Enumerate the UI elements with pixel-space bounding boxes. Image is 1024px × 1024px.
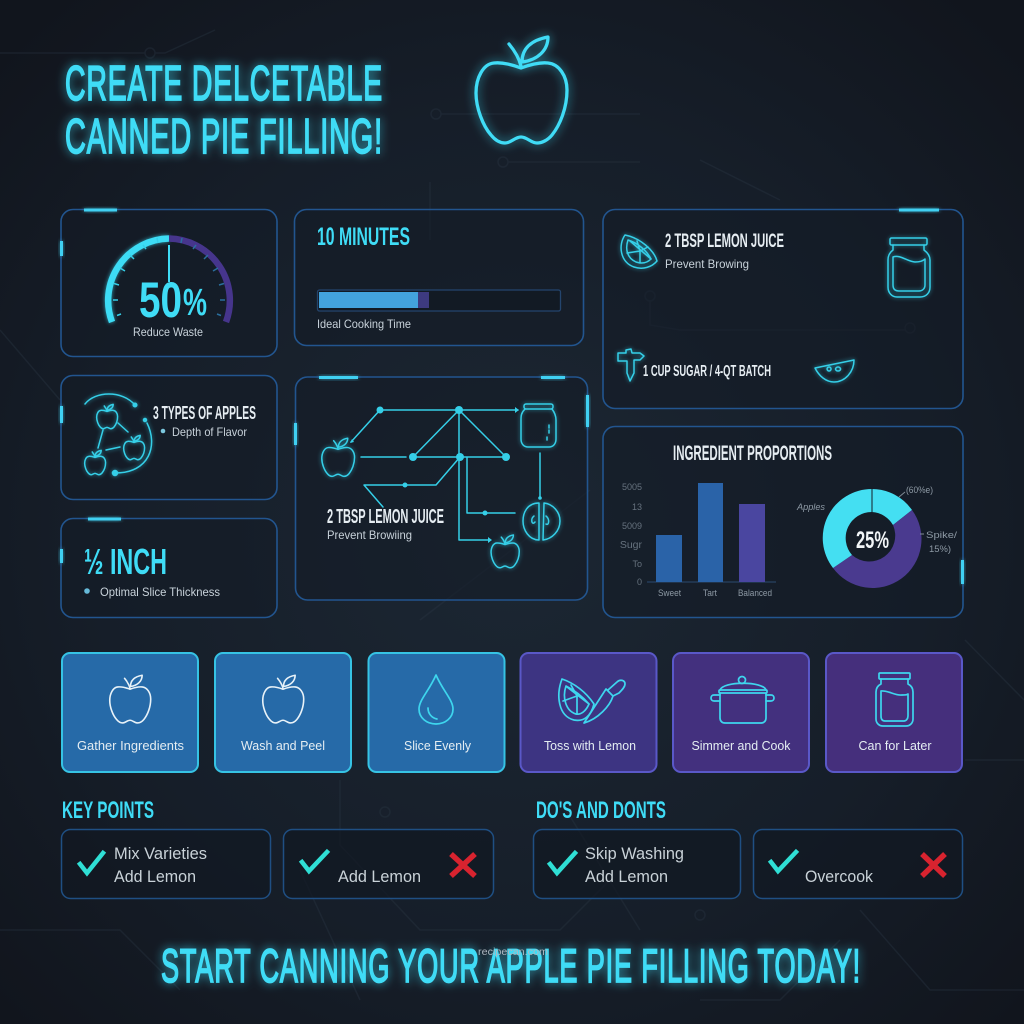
donut chart: Spike/ [926,530,957,541]
donut chart: 25% [856,527,889,554]
step: slice evenly [368,653,504,772]
title: CANNED PIE FILLING! [65,110,383,164]
icon: cross [451,854,475,876]
bar chart: 13 [632,502,642,512]
panel: lemon juice and sugar [603,208,963,408]
bar chart: To [632,559,642,569]
card: overcook: Overcook [805,867,873,886]
card: add lemon: Add Lemon [338,867,421,886]
caption: Prevent Browiing [327,528,412,542]
heading: 2 TBSP LEMON JUICE [327,506,444,528]
step: can for later: Can for Later [858,738,932,753]
icon: jar [876,673,913,726]
card: mix varieties [62,830,270,898]
bar chart [620,482,776,599]
card: add lemon [284,830,494,898]
heading: dos and donts: DO'S AND DONTS [536,797,666,824]
gauge label: Reduce Waste [133,325,203,339]
step: wash and peel [215,653,351,772]
bar chart: Sugr [620,539,642,551]
panel: ingredient proportions [603,426,964,618]
icon: pot [711,676,774,723]
icon: water drop [419,675,453,724]
step: simmer and cook: Simmer and Cook [692,738,791,753]
panel: three types of apples [60,376,277,500]
progress bar [318,290,560,311]
heading: 10 MINUTES [317,223,410,251]
caption: Ideal Cooking Time [317,317,411,331]
gauge arc [108,238,230,322]
card: skip washing: Add Lemon [585,867,668,886]
website: recipecan.com [478,947,548,958]
gauge value: 50 [139,272,182,328]
icon: cross [922,854,945,876]
panel: slice thickness [60,518,277,618]
bullet text: Optimal Slice Thickness [100,585,220,599]
heading: INGREDIENT PROPORTIONS [673,442,832,465]
icon: tool [618,349,644,381]
panel: cooking time [294,210,584,346]
bar chart: 5005 [622,482,642,492]
donut chart: Apples [796,502,825,513]
bar chart: Balanced [738,588,772,599]
bullet text: Depth of Flavor [172,425,247,439]
icon: apple [263,675,304,723]
panel: network diagram [294,376,589,600]
donut chart [796,485,957,588]
bar chart: Tart [703,588,717,599]
card: mix varieties: Mix Varieties [114,844,207,863]
bar chart: 0 [637,577,642,587]
icon: jar [521,404,556,447]
icon: check [550,853,575,873]
step: toss with lemon [520,653,656,772]
gauge value: % [183,282,207,324]
icon: lemon halves [523,503,560,540]
card: overcook [754,830,962,898]
connector lines [350,406,542,543]
heading: 2 TBSP LEMON JUICE [665,231,784,252]
donut chart: (60%e) [906,485,933,496]
card: skip washing [534,830,740,898]
icon: check [80,853,103,873]
apple cycle diagram [85,394,152,476]
icon: check [771,852,796,871]
step: gather ingredients: Gather Ingredients [77,738,184,753]
icon: apple [110,675,151,723]
caption: Prevent Browing [665,257,749,271]
step: gather ingredients [62,653,198,772]
icon: apple [322,438,355,476]
big value: ½ INCH [84,541,167,582]
icon: title apple [476,37,567,143]
icon: apple slice [815,360,854,382]
title: CREATE DELCETABLE [65,57,383,111]
icon: small apple [491,535,519,568]
icon: lemon and knife [559,679,625,723]
step: can for later [826,653,962,772]
card: mix varieties: Add Lemon [114,867,196,886]
title [65,57,383,164]
step: slice evenly: Slice Evenly [404,738,471,753]
step: simmer and cook [673,653,809,772]
icon: lemon [621,235,657,268]
icon: jar [888,238,930,297]
bar chart: 5009 [622,521,642,531]
bar chart: Sweet [658,588,681,599]
step: wash and peel: Wash and Peel [241,738,325,753]
card: skip washing: Skip Washing [585,844,684,863]
donut chart: 15%) [929,544,951,555]
step: toss with lemon: Toss with Lemon [544,738,636,753]
heading: 3 TYPES OF APPLES [153,402,256,423]
icon: check [302,852,327,871]
panel: gauge [60,208,277,356]
sugar label: 1 CUP SUGAR / 4-QT BATCH [643,363,771,380]
heading: key points: KEY POINTS [62,797,154,824]
